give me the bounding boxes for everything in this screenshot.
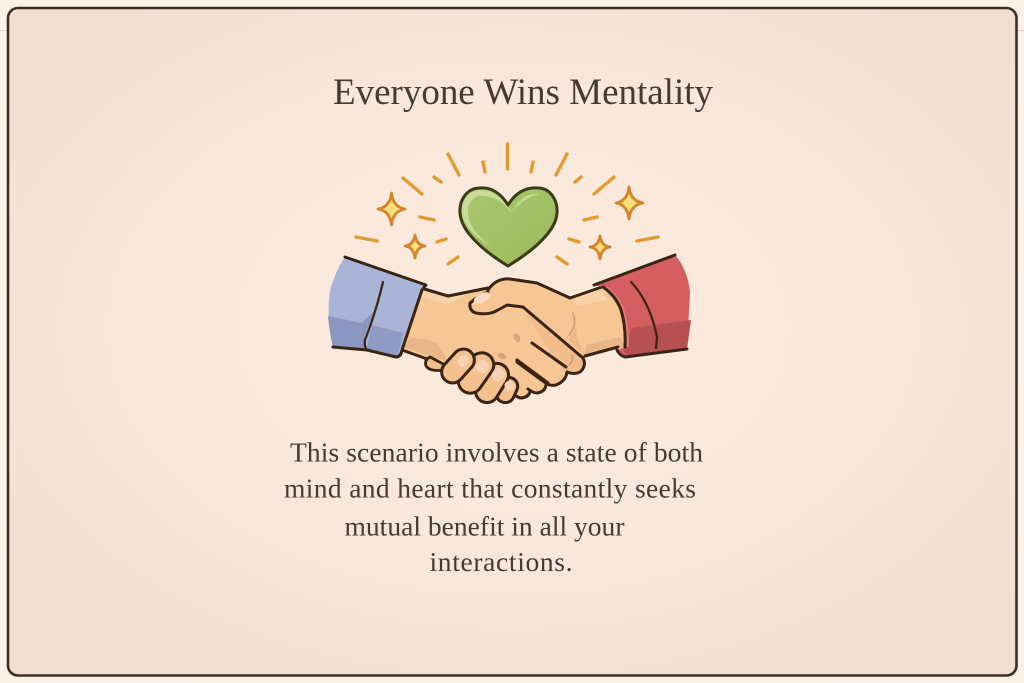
wrapped fingers <box>437 345 521 407</box>
icon: green heart <box>460 188 557 266</box>
icon: radiating rays <box>356 144 658 264</box>
description line 3: mutual benefit in all your <box>344 510 624 542</box>
right red cuff <box>594 255 691 357</box>
description line 4: interactions. <box>430 546 572 577</box>
text block: description <box>284 436 703 577</box>
finger nails <box>455 353 516 392</box>
back finger <box>426 357 447 370</box>
description line 2: mind and heart that constantly seeks <box>284 472 696 504</box>
description line 1: This scenario involves a state of both <box>290 436 703 468</box>
icon: sparkles <box>378 187 643 259</box>
icon: clasped hands <box>328 255 691 407</box>
illustration: handshake with heart <box>328 144 691 407</box>
title: Everyone Wins Mentality <box>333 72 714 113</box>
skin shading <box>403 289 626 371</box>
palms and wrists <box>402 279 632 399</box>
hand outlines <box>402 279 618 398</box>
left blue cuff <box>328 257 426 357</box>
thumb nail <box>472 290 492 306</box>
